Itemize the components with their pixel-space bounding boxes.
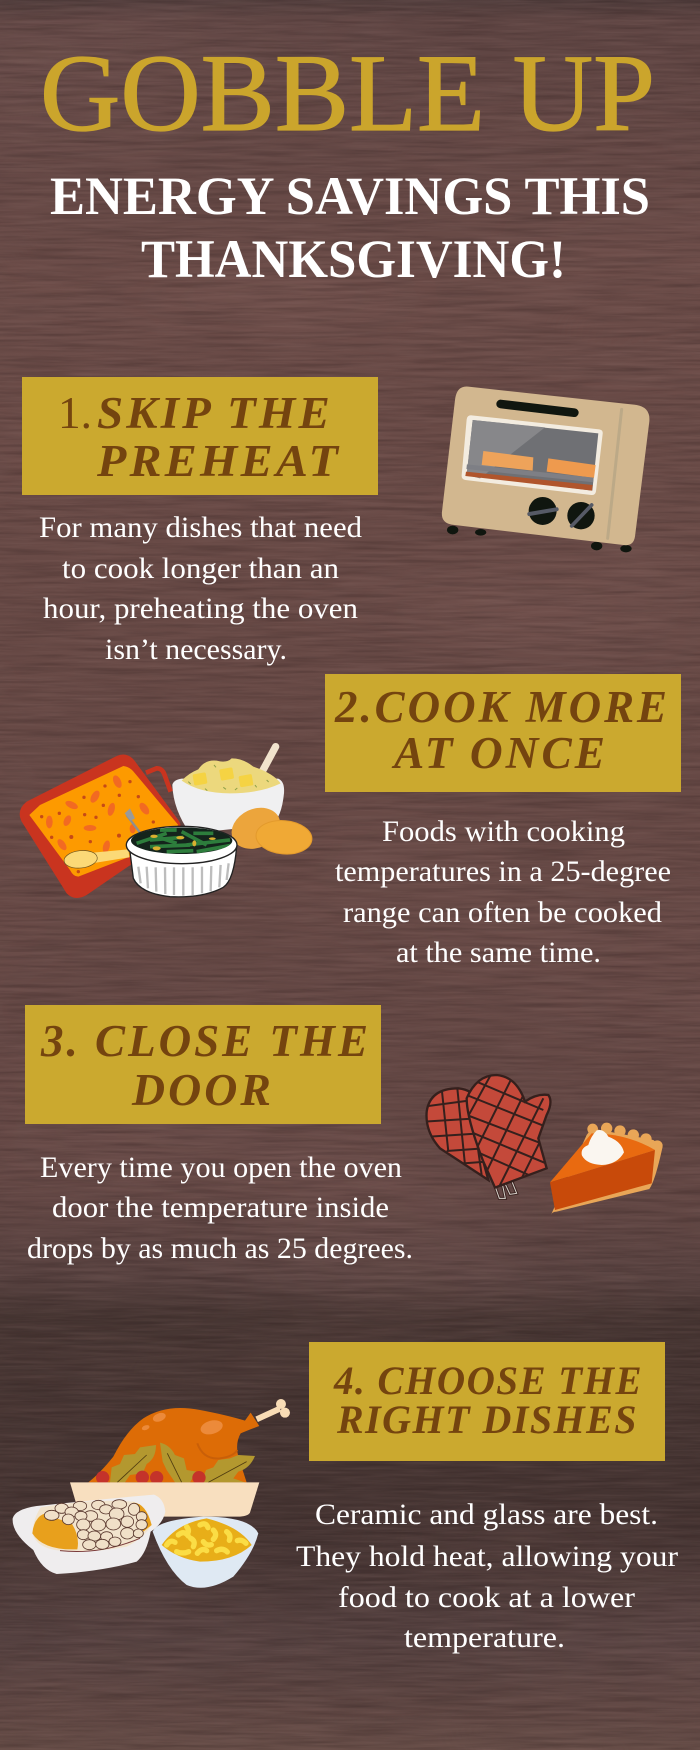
icon: casserole, mashed potatoes and green beans: [20, 747, 313, 898]
subtitle: THANKSGIVING!: [141, 229, 566, 289]
heading 1: 1.: [58, 388, 92, 438]
panel: tip 1 skip the preheat: [22, 377, 649, 666]
panel: tip 3 close the door: [25, 1005, 663, 1265]
icon: oven mitts: [423, 1073, 550, 1198]
body text 4: Ceramic and glass are best.: [315, 1499, 658, 1531]
panel: tip 4 choose the right dishes: [13, 1342, 678, 1654]
heading box 4: [309, 1342, 665, 1461]
heading 1: [58, 388, 341, 486]
body text 1: isn’t necessary.: [105, 634, 287, 666]
heading 4: RIGHT DISHES: [336, 1397, 638, 1442]
heading 3: 3. CLOSE THE: [40, 1016, 371, 1066]
heading 4: 4. CHOOSE THE: [333, 1358, 643, 1403]
body text 2: range can often be cooked: [343, 897, 662, 929]
icon: pumpkin pie: [550, 1123, 663, 1216]
heading 3: DOOR: [131, 1065, 274, 1115]
heading 2: [334, 682, 670, 778]
body text 2: temperatures in a 25-degree: [335, 856, 671, 888]
body text 1: [39, 512, 362, 666]
body text 2: at the same time.: [396, 937, 601, 969]
heading 2: AT ONCE: [391, 728, 608, 778]
body text 1: hour, preheating the oven: [43, 593, 358, 625]
body text 4: [296, 1499, 678, 1654]
body text 3: drops by as much as 25 degrees.: [27, 1233, 413, 1265]
subtitle: ENERGY SAVINGS THIS: [50, 166, 650, 226]
body text 2: [335, 816, 671, 969]
panel: tip 2 cook more at once: [20, 674, 681, 969]
icon: roast turkey on platter: [70, 1399, 290, 1517]
heading 1: PREHEAT: [96, 436, 341, 486]
heading 3: [40, 1016, 371, 1115]
subtitle: [50, 166, 650, 289]
heading 1: SKIP THE: [97, 388, 333, 438]
heading 4: [333, 1358, 643, 1442]
heading box 2: [325, 674, 681, 792]
body text 4: temperature.: [404, 1622, 565, 1654]
body text 1: to cook longer than an: [62, 553, 339, 585]
body text 1: For many dishes that need: [39, 512, 362, 544]
heading 2: 2.COOK MORE: [334, 682, 670, 732]
heading box 3: [25, 1005, 381, 1124]
icon: macaroni bowl: [153, 1517, 258, 1588]
icon: marshmallow casserole dish: [13, 1495, 165, 1574]
body text 2: Foods with cooking: [382, 816, 625, 848]
body text 3: Every time you open the oven: [40, 1152, 402, 1184]
title: GOBBLE UP: [40, 32, 655, 154]
body text 4: They hold heat, allowing your: [296, 1541, 678, 1573]
body text 3: door the temperature inside: [52, 1192, 389, 1224]
icon: toaster oven: [442, 387, 649, 552]
body text 4: food to cook at a lower: [338, 1582, 635, 1614]
body text 3: [27, 1152, 413, 1265]
heading box 1: [22, 377, 378, 495]
